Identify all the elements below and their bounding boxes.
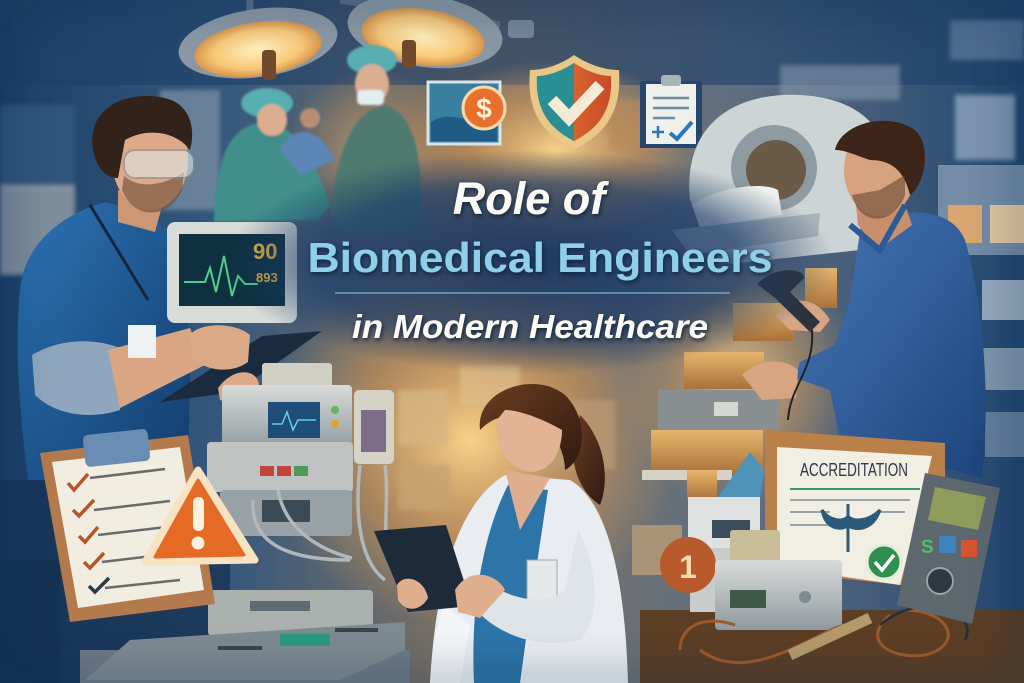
black clipboard and hand	[160, 325, 322, 402]
icon: money: $	[476, 93, 492, 124]
small equipment pile	[660, 452, 967, 663]
surgical lights	[174, 0, 534, 88]
handheld meter	[897, 473, 1000, 624]
warning triangle	[145, 470, 255, 562]
checklist clipboard	[40, 429, 215, 622]
cardboard boxes	[632, 268, 837, 575]
title: in Modern Healthcare	[352, 308, 708, 345]
shelves on the right	[938, 165, 1024, 457]
small equipment pile: 1	[679, 549, 697, 585]
title: Role of	[453, 173, 609, 224]
title: Biomedical Engineers	[308, 234, 772, 281]
patient monitor: 90	[253, 239, 277, 264]
patient monitor	[167, 222, 297, 323]
MRI scanner	[672, 95, 886, 265]
medical device stack	[85, 363, 405, 680]
title	[308, 173, 772, 345]
title divider	[335, 292, 730, 294]
surgeons in background	[214, 45, 421, 232]
icon: checklist clipboard	[640, 75, 702, 148]
icon: money	[428, 82, 505, 144]
accreditation document	[765, 430, 945, 590]
tablet with hands	[374, 525, 505, 618]
handheld meter: S	[921, 537, 934, 558]
right engineer	[742, 121, 986, 478]
icon: shield with check	[529, 55, 619, 149]
left engineer	[18, 96, 205, 480]
accreditation document: ACCREDITATION	[800, 459, 908, 480]
patient monitor: 893	[256, 270, 278, 285]
title panel shade	[225, 150, 835, 374]
nurse	[430, 384, 628, 683]
